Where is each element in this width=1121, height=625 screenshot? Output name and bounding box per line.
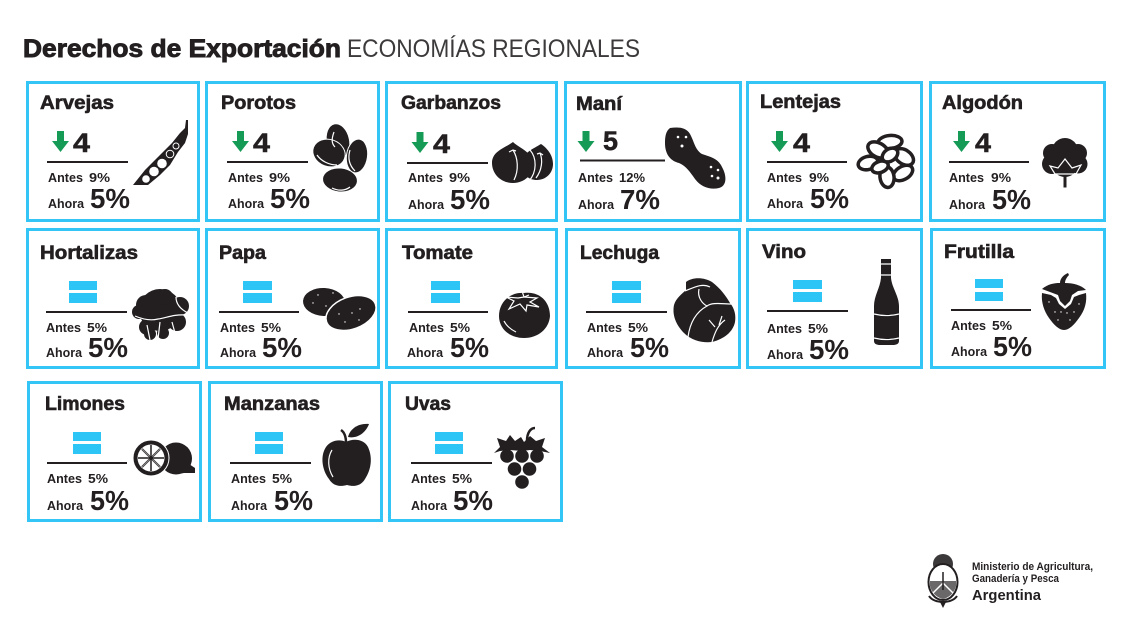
- panel: Garbanzos: 9%: [449, 170, 470, 185]
- icon: apple: [322, 424, 371, 486]
- panel: Lechuga: [566, 230, 740, 368]
- panel: Algodón: Algodón: [942, 93, 1023, 114]
- panel: Lechuga: Ahora: [587, 345, 624, 360]
- icon: down arrow: [578, 131, 594, 152]
- panel: Porotos: 9%: [269, 170, 290, 185]
- panel: Papa: [206, 230, 381, 368]
- icon: equal sign: [612, 281, 641, 303]
- panel: Tomate: Antes: [409, 320, 444, 335]
- panel: Manzanas: 5%: [272, 471, 292, 486]
- panel: Lechuga: 5%: [628, 320, 648, 335]
- panel: Lentejas: Antes: [767, 170, 802, 185]
- panel: Algodón: 9%: [991, 170, 1011, 185]
- panel: Hortalizas: Ahora: [46, 345, 83, 360]
- panel: Manzanas: 5%: [274, 485, 313, 516]
- panel: Algodón: 4: [975, 128, 991, 158]
- icon: down arrow: [232, 131, 249, 152]
- panel: Vino: 5%: [809, 334, 849, 365]
- panel: Hortalizas: Hortalizas: [40, 243, 138, 264]
- panel: Limones: Ahora: [47, 498, 84, 513]
- panel: Tomate: Ahora: [407, 345, 444, 360]
- panel: Porotos: Antes: [228, 170, 263, 185]
- panel: Manzanas: Ahora: [231, 498, 268, 513]
- panel: Vino: Antes: [767, 321, 802, 336]
- panel: Arvejas: 9%: [89, 170, 110, 185]
- title: ECONOMÍAS REGIONALES: [347, 34, 640, 63]
- panel: Maní: Ahora: [578, 197, 615, 212]
- icon: equal sign: [435, 432, 463, 454]
- icon: equal sign: [243, 281, 272, 303]
- icon: grapes: [494, 428, 550, 489]
- icon: cotton: [1042, 138, 1088, 188]
- panel: Porotos: [206, 82, 378, 220]
- panel: Algodón: Antes: [949, 170, 984, 185]
- panel: Papa: Ahora: [220, 345, 257, 360]
- panel: Arvejas: Arvejas: [40, 93, 114, 114]
- panel: Hortalizas: [28, 230, 198, 368]
- panel: Lentejas: 9%: [809, 170, 829, 185]
- panel: Frutilla: Ahora: [951, 344, 988, 359]
- panel: Lechuga: 5%: [630, 332, 669, 363]
- panel: Vino: Ahora: [767, 347, 804, 362]
- panel: Papa: Antes: [220, 320, 255, 335]
- panel: Arvejas: Antes: [48, 170, 83, 185]
- icon: equal sign: [975, 279, 1003, 301]
- icon: lentils: [857, 134, 917, 188]
- panel: Uvas: 5%: [452, 471, 472, 486]
- panel: Porotos: Porotos: [221, 93, 296, 114]
- panel: Limones: Antes: [47, 471, 82, 486]
- panel: Tomate: Tomate: [402, 243, 473, 264]
- icon: strawberry: [1042, 273, 1086, 330]
- panel: Limones: [28, 382, 200, 520]
- title: [23, 34, 640, 63]
- panel: Maní: 5: [603, 126, 618, 156]
- panel: Vino: Vino: [762, 242, 806, 263]
- panel: Uvas: Uvas: [405, 394, 451, 415]
- panel: Vino: 5%: [808, 321, 828, 336]
- panel: Uvas: [390, 382, 562, 520]
- panel: Maní: Maní: [576, 94, 623, 115]
- icon: equal sign: [793, 280, 822, 302]
- panel: Lentejas: Ahora: [767, 196, 804, 211]
- panel: Garbanzos: 5%: [450, 184, 490, 215]
- panel: Maní: Antes: [578, 170, 613, 185]
- icon: potatoes: [302, 287, 381, 337]
- icon: lettuce: [673, 278, 735, 342]
- panel: Hortalizas: 5%: [87, 320, 107, 335]
- icon: wine bottle: [874, 259, 899, 345]
- panel: Porotos: Ahora: [228, 196, 265, 211]
- icon: equal sign: [431, 281, 460, 303]
- panel: Maní: 7%: [620, 184, 660, 215]
- panel: Lentejas: 5%: [810, 183, 849, 214]
- logo: Ministerio de Agricultura: Argentina: [972, 587, 1042, 604]
- panel: Frutilla: Frutilla: [944, 242, 1014, 263]
- panel: Lentejas: 4: [793, 128, 810, 158]
- panel: Lechuga: Lechuga: [580, 243, 659, 264]
- icon: equal sign: [255, 432, 283, 454]
- panel: Maní: [566, 82, 740, 220]
- panel: Garbanzos: Ahora: [408, 197, 445, 212]
- icon: chickpeas: [492, 142, 553, 183]
- panel: Manzanas: Manzanas: [224, 394, 320, 415]
- panel: Lechuga: Antes: [587, 320, 622, 335]
- panel: Papa: 5%: [261, 320, 281, 335]
- logo: Ministerio de Agricultura: Ministerio de Agricultura,: [972, 561, 1093, 573]
- panel: Vino: [748, 230, 922, 368]
- panel: Lentejas: Lentejas: [760, 92, 841, 113]
- panel: Uvas: 5%: [453, 485, 493, 516]
- icon: tomato: [499, 291, 550, 338]
- panel: Arvejas: Ahora: [48, 196, 85, 211]
- panel: Arvejas: 5%: [90, 183, 130, 214]
- panel: Tomate: 5%: [450, 332, 489, 363]
- panel: Garbanzos: [386, 82, 556, 220]
- panel: Tomate: [386, 230, 556, 368]
- panel: Garbanzos: Antes: [408, 170, 443, 185]
- panel: Limones: Limones: [45, 394, 125, 415]
- panel: Hortalizas: Antes: [46, 320, 81, 335]
- panel: Tomate: 5%: [450, 320, 470, 335]
- logo: Ministerio de Agricultura: Ganadería y Pesca: [972, 573, 1060, 585]
- icon: down arrow: [771, 131, 788, 152]
- panel: Limones: 5%: [90, 485, 129, 516]
- panel: Papa: 5%: [262, 332, 302, 363]
- panel: Garbanzos: Garbanzos: [401, 93, 501, 114]
- panel: Arvejas: [28, 82, 198, 220]
- panel: Lentejas: [748, 82, 922, 220]
- icon: lemons: [133, 440, 195, 476]
- icon: down arrow: [412, 132, 428, 153]
- icon: equal sign: [69, 281, 97, 303]
- panel: Maní: 12%: [619, 170, 645, 185]
- icon: coat of arms: [928, 554, 958, 608]
- icon: down arrow: [52, 131, 69, 152]
- title: Derechos de Exportación: [23, 35, 341, 63]
- panel: Algodón: 5%: [992, 184, 1031, 215]
- icon: pea pod: [133, 120, 188, 185]
- panel: Uvas: Antes: [411, 471, 446, 486]
- panel: Uvas: Ahora: [411, 498, 448, 513]
- panel: Porotos: 5%: [270, 183, 310, 214]
- icon: vegetables: [132, 289, 189, 340]
- panel: Frutilla: 5%: [992, 318, 1012, 333]
- logo: Ministerio de Agricultura: [928, 554, 1093, 608]
- panel: Frutilla: Antes: [951, 318, 986, 333]
- icon: beans: [309, 122, 370, 193]
- icon: down arrow: [953, 131, 970, 152]
- panel: Garbanzos: 4: [433, 129, 450, 159]
- panel: Frutilla: [932, 230, 1104, 368]
- panel: Porotos: 4: [253, 128, 270, 158]
- panel: Algodón: [930, 82, 1104, 220]
- panel: Limones: 5%: [88, 471, 108, 486]
- icon: equal sign: [73, 432, 101, 454]
- panel: Hortalizas: 5%: [88, 332, 128, 363]
- panel: Algodón: Ahora: [949, 197, 986, 212]
- panel: Manzanas: [210, 382, 382, 520]
- panel: Papa: Papa: [219, 243, 266, 264]
- panel: Arvejas: 4: [73, 128, 90, 158]
- panel: Manzanas: Antes: [231, 471, 266, 486]
- icon: peanut: [665, 128, 725, 189]
- panel: Frutilla: 5%: [993, 331, 1032, 362]
